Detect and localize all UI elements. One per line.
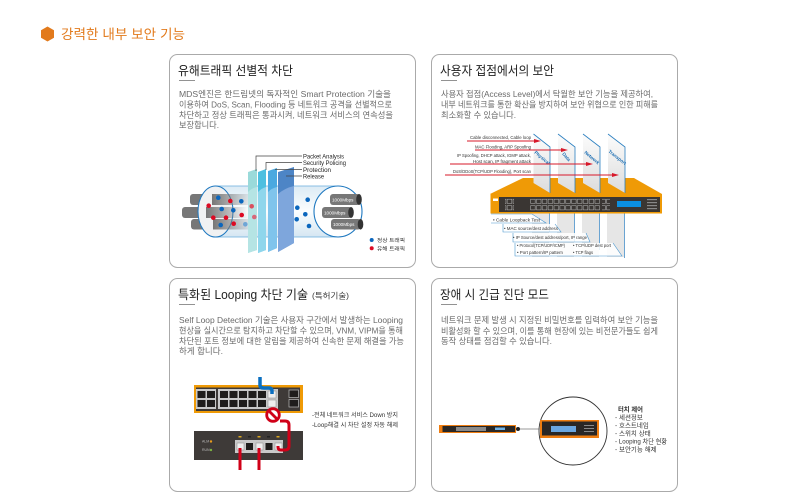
attack labels and arrows: Cable disconnected, Cable loop	[470, 135, 531, 141]
diagram: layered protection on switch	[445, 134, 662, 258]
switch front	[490, 194, 662, 214]
tube body	[215, 186, 335, 237]
diagram: touch control	[439, 397, 667, 465]
defense callouts: • MAC source/dest address	[504, 226, 558, 232]
touch control list	[615, 404, 667, 453]
attack labels and arrows	[445, 135, 619, 177]
body text: 사용자 접점(Access Level)에서 탁월한 보안 기능을 제공하여,	[441, 88, 653, 99]
top switch	[194, 385, 303, 413]
right pipes	[322, 194, 363, 230]
layer names on planes: Physical	[533, 150, 551, 166]
filter plates	[248, 167, 294, 253]
blue cable	[260, 377, 272, 394]
diagram: loop detection	[194, 377, 398, 470]
touch control list: - Looping 차단 현황	[615, 436, 667, 445]
panel heading: 유해트래픽 선별적 차단	[178, 64, 293, 78]
legend: 유해 트래픽	[377, 245, 405, 252]
body text: 보장합니다.	[179, 120, 219, 130]
upper planes	[534, 134, 625, 193]
body text: 이용하여 DoS, Scan, Flooding 등 네트워크 공격을 선별적으로	[179, 98, 392, 110]
inner pipes	[206, 194, 255, 230]
body text: 하게 합니다.	[179, 346, 223, 356]
connector line	[516, 427, 541, 431]
body text: 동작 상태를 점검할 수 있습니다.	[441, 335, 552, 346]
lower device	[194, 431, 303, 460]
lower device: RUN	[202, 448, 210, 452]
right pipes: 1000Mbps	[324, 210, 346, 215]
body text	[441, 88, 658, 120]
body text: 차단된 포트 정보에 대한 알림을 제공하여 신속한 문제 해결을 가능	[179, 335, 404, 346]
legend	[370, 237, 405, 252]
panel heading: 사용자 접점에서의 보안	[440, 64, 554, 78]
panel: looping block	[170, 278, 416, 492]
body text: Self Loop Detection 기술은 사용자 구간에서 발생하는 Looping	[179, 315, 403, 325]
layer names on planes: Transport	[607, 149, 628, 166]
legend: 정상 트래픽	[377, 237, 405, 244]
body text: 최소화할 수 있습니다.	[441, 109, 516, 120]
faded dots seen through plates	[243, 204, 257, 227]
magnifier circle	[539, 397, 607, 465]
small device	[439, 425, 516, 433]
attack labels and arrows: Host scan, IP fragment attack	[473, 159, 532, 165]
layer names on planes: Network	[583, 150, 601, 166]
filter labels with leader lines	[256, 154, 346, 180]
touch control list: - 세션정보	[615, 412, 643, 421]
icon: blocked symbol	[267, 409, 279, 421]
callout text: -Loop해결 시 차단 설정 자동 해제	[312, 421, 398, 429]
body text: 내부 네트워크를 통한 확산을 방지하여 보안 위협으로 인한 피해를	[441, 98, 658, 110]
body text: 비활성화 할 수 있으며, 이를 통해 현장에 있는 비전문가들도 쉽게	[441, 325, 658, 336]
left pipes	[182, 194, 221, 230]
red cables	[240, 421, 289, 470]
switch top	[490, 178, 662, 194]
filter labels with leader lines: Security Policing	[303, 161, 346, 167]
panel heading: 장애 시 긴급 진단 모드	[440, 288, 549, 302]
defense callouts: • IP Source/dest address/port, IP range	[513, 235, 587, 241]
icon: orange hexagon	[41, 26, 54, 42]
panel heading: 특화된 Looping 차단 기술	[178, 288, 308, 302]
touch control list: - 보안기능 해제	[615, 444, 657, 453]
attack labels and arrows: DoS/DDoS(TCP/UDP Flooding), Port scan	[453, 169, 531, 175]
defense callouts: • Cable Loopback Test	[493, 218, 541, 224]
right pipes: 1000Mbps	[333, 222, 355, 227]
body text: 현상을 실시간으로 탐지하고 차단할 수 있으며, VNM, VIPM을 통해	[179, 324, 403, 336]
filter labels with leader lines: Packet Analysis	[303, 154, 344, 160]
body text	[179, 315, 404, 356]
callout text: -전체 네트워크 서비스 Down 방지	[312, 411, 398, 419]
body text: 네트워크 문제 발생 시 지정된 비밀번호를 입력하여 보안 기능을	[441, 314, 658, 325]
panel: access security	[432, 54, 678, 268]
defense callouts: • TCP/UDP dest port	[573, 243, 612, 249]
touch control list: - 호스트네임	[615, 420, 649, 429]
panel: emergency diagnostic mode	[432, 278, 678, 492]
body text	[441, 314, 658, 346]
body text: MDS엔진은 한드림넷의 독자적인 Smart Protection 기술을	[179, 88, 391, 99]
lower device: ALM	[202, 440, 209, 444]
filter labels with leader lines: Protection	[303, 168, 331, 174]
traffic dots	[206, 195, 311, 228]
diagram: traffic filter tube	[182, 154, 405, 253]
panel: harmful traffic blocking	[170, 54, 416, 268]
defense callouts: • Port pattern/IP pattern	[517, 250, 563, 256]
left opening	[198, 186, 233, 237]
body text: 차단하고 정상 트래픽은 통과시켜, 네트워크 서비스의 연속성을	[179, 110, 393, 120]
body text	[179, 88, 393, 130]
lower planes	[532, 213, 624, 258]
right pipes: 1000Mbps	[332, 197, 354, 202]
layer names on planes	[533, 149, 628, 166]
heading note: (특허기술)	[312, 290, 349, 300]
defense callouts: • TCP flags	[573, 250, 593, 256]
touch control list: - 스위치 상태	[615, 428, 651, 437]
touch control list: 터치 제어	[618, 404, 643, 413]
attack labels and arrows: IP Spoofing, DHCP attack, IGMP attack,	[457, 153, 531, 159]
callout text	[312, 411, 398, 429]
right opening	[314, 186, 362, 237]
filter labels with leader lines: Release	[303, 174, 325, 180]
magnified device	[540, 420, 599, 438]
attack labels and arrows: MAC Flooding, ARP Spoofing	[475, 144, 531, 150]
defense callouts: • Protocol(TCP/UDP/ICMP)	[517, 243, 565, 249]
section heading	[41, 26, 185, 42]
layer names on planes: Data	[561, 151, 572, 163]
defense callouts	[491, 214, 622, 256]
heading text: 강력한 내부 보안 기능	[61, 27, 185, 42]
